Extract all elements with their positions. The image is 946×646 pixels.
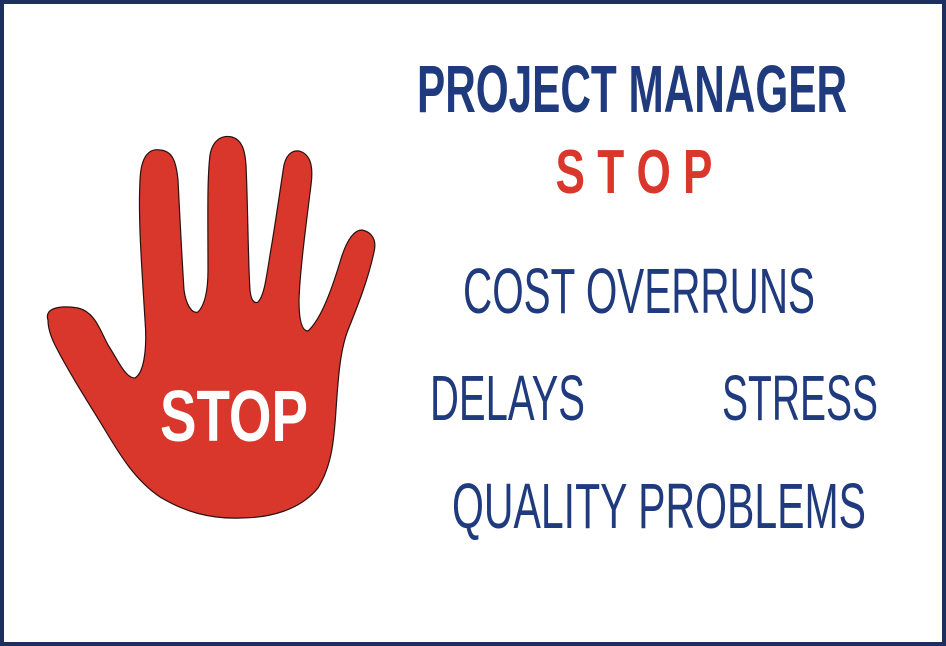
item: delays: DELAYS [430, 362, 585, 434]
hand label: STOP: STOP [160, 377, 308, 457]
icon: red stop hand [47, 136, 375, 518]
subtitle: STOP: S T O P [556, 138, 712, 207]
